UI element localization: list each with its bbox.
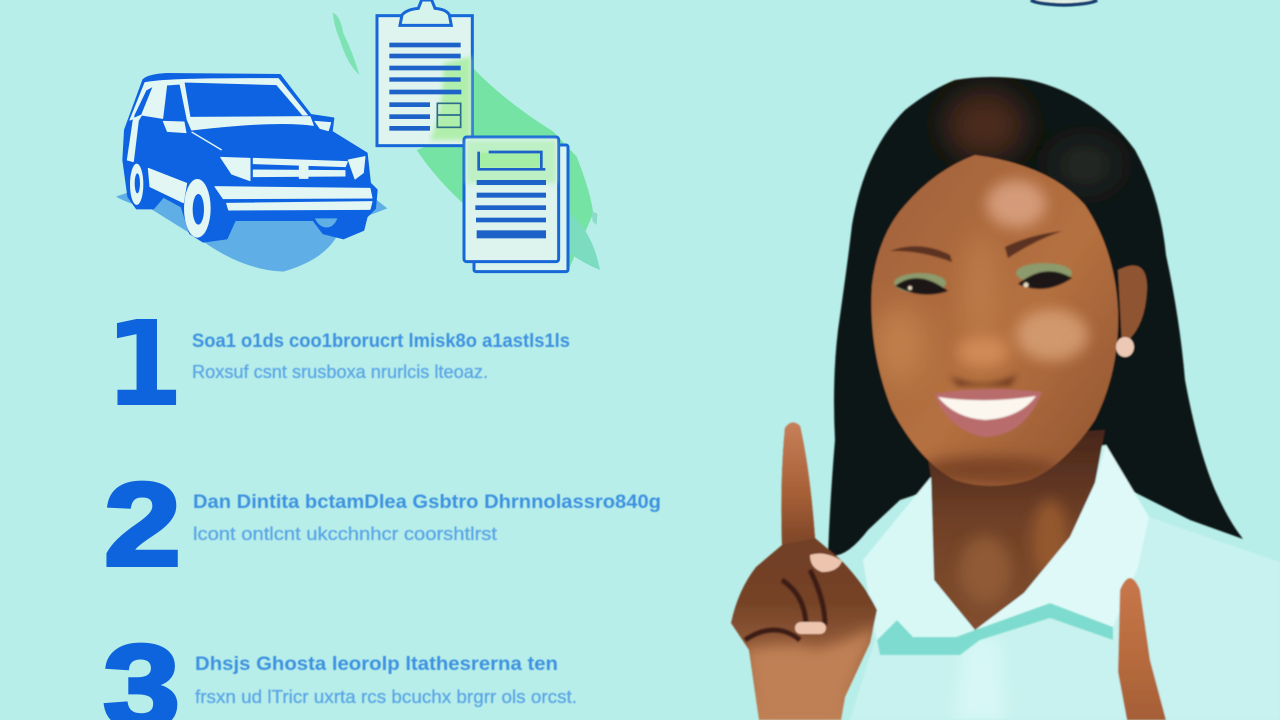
description 3: frsxn ud lTricr uxrta rcs bcuchx brgrr ols orcst. bbox=[195, 687, 577, 707]
eyebrows bbox=[890, 231, 1062, 262]
green swoosh bbox=[333, 13, 600, 270]
neck bbox=[926, 429, 1106, 631]
heading 3: Dhsjs Ghosta leorolp ltathesrerna ten bbox=[195, 654, 558, 675]
eyes bbox=[894, 263, 1072, 295]
car shadow bbox=[116, 192, 387, 272]
ear and earring bbox=[1116, 266, 1147, 357]
hair bbox=[828, 77, 1243, 556]
heading 2: Dan Dintita bctamDlea Gsbtro Dhrnnolassro840g bbox=[193, 492, 661, 513]
car light details bbox=[127, 79, 372, 210]
heading 1: Soa1 o1ds coo1brorucrt lmisk8o a1astls1ls bbox=[192, 331, 570, 352]
clipboard bbox=[377, 0, 472, 146]
icon: blue car bbox=[116, 74, 387, 272]
mouth bbox=[934, 389, 1042, 437]
car wheels bbox=[130, 164, 211, 238]
car body bbox=[123, 74, 377, 242]
photo: smiling woman pointing up bbox=[731, 77, 1280, 720]
shirt collar bbox=[863, 445, 1149, 655]
description 2: lcont ontlcnt ukcchnhcr coorshtlrst bbox=[193, 524, 497, 544]
number 1: 1 bbox=[104, 295, 184, 433]
face highlights bbox=[874, 180, 1088, 484]
icon: cropped emblem at top edge bbox=[1031, 0, 1097, 6]
icon: document illustration with clipboard and pages bbox=[333, 0, 600, 272]
list item 3 bbox=[103, 621, 577, 720]
shirt bbox=[850, 445, 1280, 720]
left hand with raised finger bbox=[731, 422, 880, 720]
list item 2 bbox=[104, 459, 661, 591]
right raised finger bbox=[1118, 578, 1166, 720]
number 2: 2 bbox=[104, 459, 181, 591]
face bbox=[871, 155, 1118, 486]
description 1: Roxsuf csnt srusboxa nrurlcis lteoaz. bbox=[192, 362, 488, 382]
list item 1 bbox=[104, 295, 570, 433]
stacked pages bbox=[464, 137, 568, 272]
